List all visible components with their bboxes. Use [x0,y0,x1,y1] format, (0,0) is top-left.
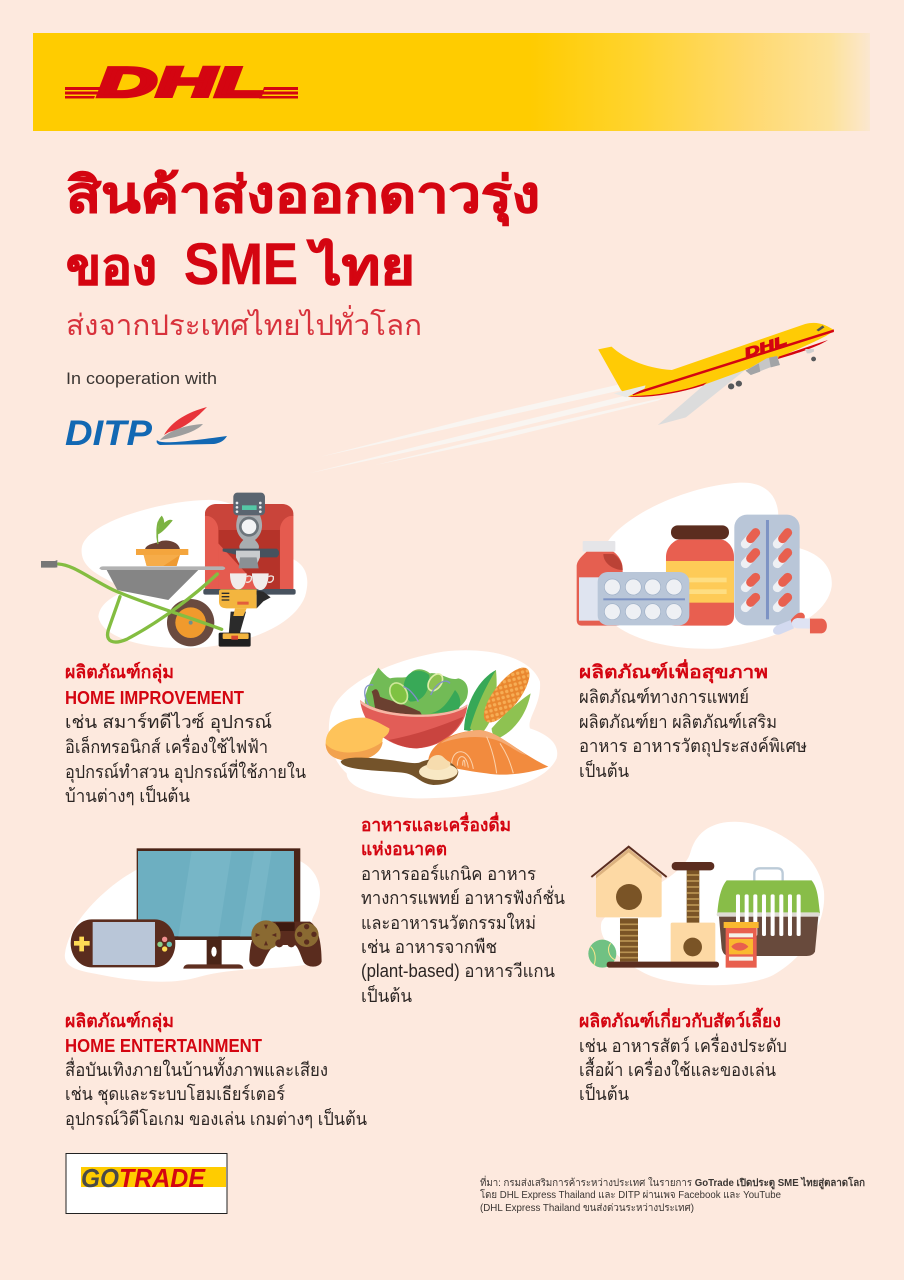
small bottle [577,541,623,626]
text: future food: อาหารออร์แกนิค อาหาร [361,864,536,884]
round pill blister [598,572,689,625]
GoTrade logo box [66,1154,227,1214]
monitor [137,848,300,969]
text: pet products [579,1007,787,1104]
salmon [428,730,548,775]
DHL logo [65,58,298,106]
cat house [591,847,667,962]
DITP logo: DITP [65,414,153,453]
text: pet products: ผลิตภัณฑ์เกี่ยวกับสัตว์เลี้ยง [579,1007,781,1031]
text: home improvement: อุปกรณ์ทำสวน อุปกรณ์ที่ใช้ภายใน [65,759,306,783]
text: future food: เช่น อาหารจากพืช [361,937,497,957]
text: home entertainment [65,1010,367,1130]
DHL logo: DHL [98,58,265,106]
text: home entertainment: HOME ENTERTAINMENT [65,1036,262,1056]
text: home improvement: HOME IMPROVEMENT [65,688,244,708]
subtitle: ส่งจากประเทศไทยไปทั่วโลก [66,305,422,342]
handheld console [71,919,175,967]
text: future food: อาหารและเครื่องดื่ม [361,812,511,835]
DITP logo [65,407,227,453]
text: future food: (plant-based) อาหารวีแกน [361,961,555,981]
cordless drill [219,589,271,647]
airplane with contrails [309,323,834,473]
wheelbarrow handle [41,560,57,568]
text: home improvement [65,661,306,806]
pet food can [724,922,759,968]
text: health products: ผลิตภัณฑ์ยา ผลิตภัณฑ์เสริม [579,712,777,732]
coffee machine [203,493,296,595]
source note: โดย DHL Express Thailand และ DITP ผ่านเพจ Facebook และ YouTube [480,1188,781,1201]
text: home improvement: อิเล็กทรอนิกส์ เครื่องใช้ไฟฟ้า [65,734,268,757]
salad dressing [372,689,422,714]
text: home improvement: ผลิตภัณฑ์กลุ่ม [65,661,174,684]
text: future food: และอาหารนวัตกรรมใหม่ [361,912,536,933]
illustration: cat house, scratching post, carrier, food can [588,822,824,985]
plane tail fin and fuselage [598,323,834,397]
salad greens [365,668,468,715]
text: health products: ผลิตภัณฑ์ทางการแพทย์ [579,687,749,707]
GoTrade logo box: GO [81,1163,119,1193]
text: health products: เป็นต้น [579,759,629,781]
title: SME [184,232,298,297]
bowl [360,700,467,748]
text: future food [361,812,565,1006]
illustration: wheelbarrow, coffee machine, drill [41,493,307,648]
text: pet products: เสื้อผ้า เครื่องใช้และของเล่น [579,1057,776,1080]
text: future food: ทางการแพทย์ อาหารฟังก์ชั่น [361,885,565,908]
title: ของ [66,239,157,295]
panel: health products [577,483,832,781]
loose capsules [773,613,827,635]
panel: home entertainment [65,848,367,1130]
source note: ที่มา: กรมส่งเสริมการค้าระหว่างประเทศ ในรายการ GoTrade เปิดประตู SME ไทยสู่ตลาดโลก [480,1175,865,1190]
title: ไทย [306,238,415,295]
text: health products: อาหาร อาหารวัตถุประสงค์พิเศษ [579,736,807,757]
panel: pet products [579,822,824,1104]
plane livery text: DHL [742,333,789,360]
title: สินค้าส่งออกดาวรุ่ง [66,167,540,226]
spoon [341,755,458,785]
wheelbarrow frame [58,564,222,642]
wheelbarrow tray [99,566,225,600]
plane red stripes [628,329,834,397]
text: pet products: เช่น อาหารสัตว์ เครื่องประดับ [579,1033,787,1056]
plane engine [746,356,780,375]
text: health products [579,659,807,781]
text: home entertainment: เช่น ชุดและระบบโฮมเธียร์เตอร์ [65,1083,285,1105]
capsule blister [734,515,800,625]
text: future food: แห่งอนาคต [361,839,447,859]
plane wing [658,368,747,425]
plant pot [136,517,188,566]
panel: home improvement [41,493,307,806]
text: home improvement: เช่น สมาร์ทดีไวซ์ อุปกรณ์ [65,711,272,733]
corn [464,661,537,738]
source note: (DHL Express Thailand ขนส่งด่วนระหว่างประเทศ) [480,1203,694,1214]
coffee cups [230,573,273,590]
cockpit window [816,325,824,331]
large jar [666,525,734,626]
panel: future food [326,650,565,1006]
lemon [326,718,389,761]
tennis ball [588,940,616,968]
text: home entertainment: สื่อบันเทิงภายในบ้านทั้งภาพและเสียง [65,1057,328,1080]
text: home entertainment: อุปกรณ์วิดีโอเกม ของเล่น เกมต่างๆ เป็นต้น [65,1107,367,1130]
plane landing gear [728,349,816,389]
illustration: salad, corn, salmon, lemon, spoon [326,650,557,798]
cucumber slices [386,671,446,707]
header banner [33,33,870,131]
gamepad [249,920,322,967]
cooperation label: In cooperation with [66,370,217,388]
text: health products: ผลิตภัณฑ์เพื่อสุขภาพ [579,659,768,684]
text: home entertainment: ผลิตภัณฑ์กลุ่ม [65,1010,174,1033]
illustration: monitor, handheld console, gamepad [65,848,322,982]
text: pet products: เป็นต้น [579,1082,629,1104]
onion rings [365,681,450,705]
pet carrier [717,868,820,956]
text: future food: เป็นต้น [361,984,412,1006]
contrails [309,384,665,473]
text: home improvement: บ้านต่างๆ เป็นต้น [65,784,190,806]
illustration: medicine bottles and pills [577,483,832,649]
GoTrade logo box: TRADE [119,1163,206,1193]
wheel [167,599,214,646]
tail plane [614,385,646,397]
scratching post [607,862,719,968]
source note [480,1175,865,1214]
title [66,167,540,297]
